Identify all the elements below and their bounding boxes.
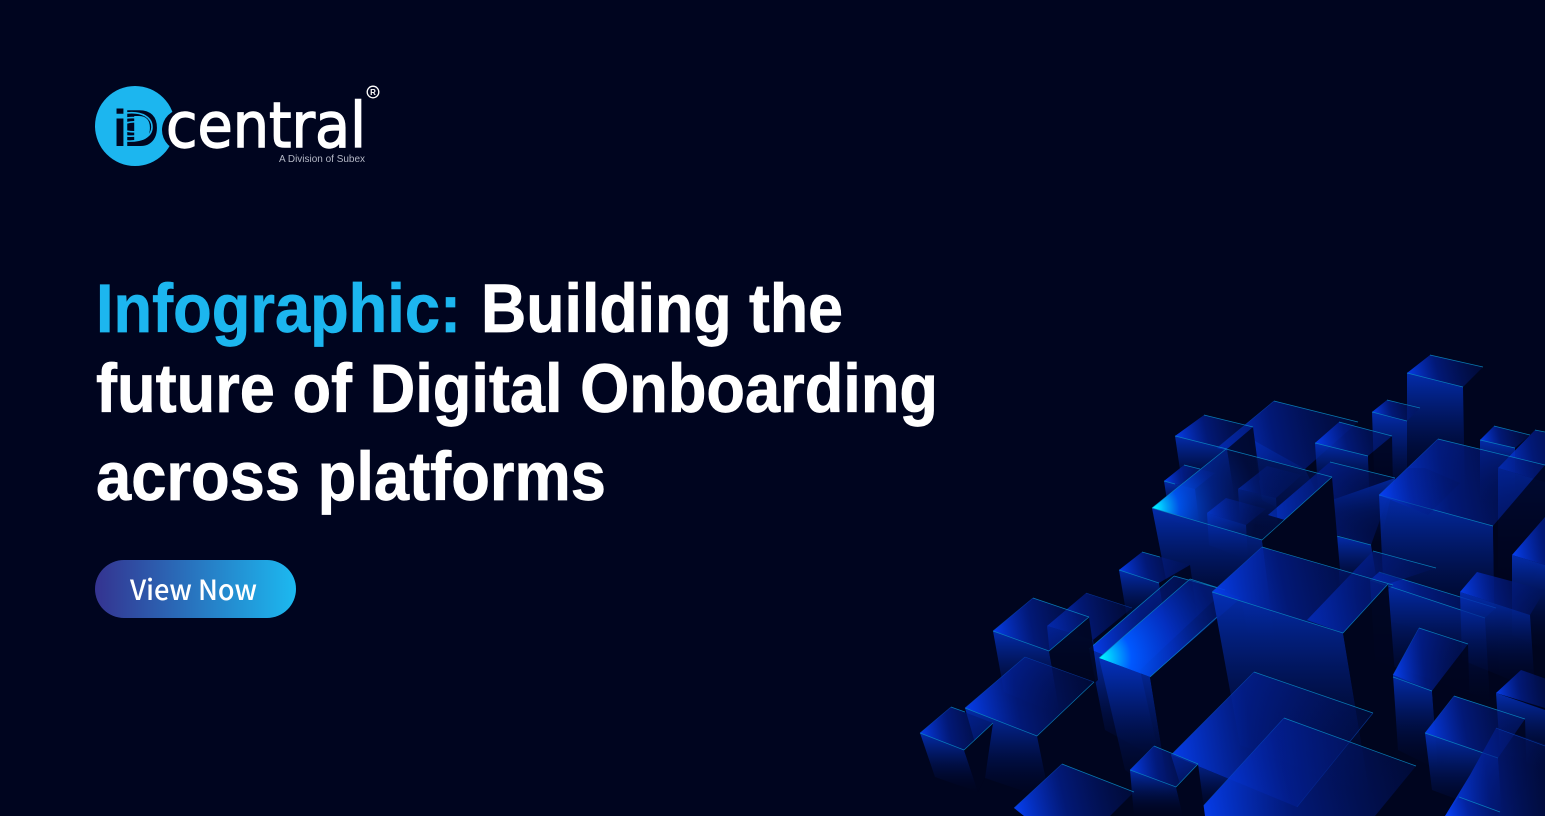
logo: iD central — [95, 86, 379, 166]
tagline: A Division of Subex — [279, 153, 366, 165]
title — [96, 270, 938, 515]
title: Infographic: — [96, 270, 461, 347]
illustration: glowing blue 3D cubes — [920, 355, 1545, 816]
title: future of Digital Onboarding — [96, 350, 938, 427]
button: View Now — [95, 560, 296, 618]
logo letters iD: D — [124, 100, 159, 158]
title: across platforms — [96, 438, 606, 515]
button: View Now: View Now — [129, 569, 257, 609]
badge cut-out behind the c — [162, 109, 204, 151]
registered mark: R — [370, 88, 376, 97]
wordmark: central: central — [166, 89, 366, 162]
title: Building the — [481, 270, 843, 347]
logo badge circle — [95, 86, 175, 166]
logo letters iD: i — [113, 100, 127, 158]
icon: fingerprint arcs — [126, 113, 152, 141]
registered mark — [367, 86, 379, 98]
